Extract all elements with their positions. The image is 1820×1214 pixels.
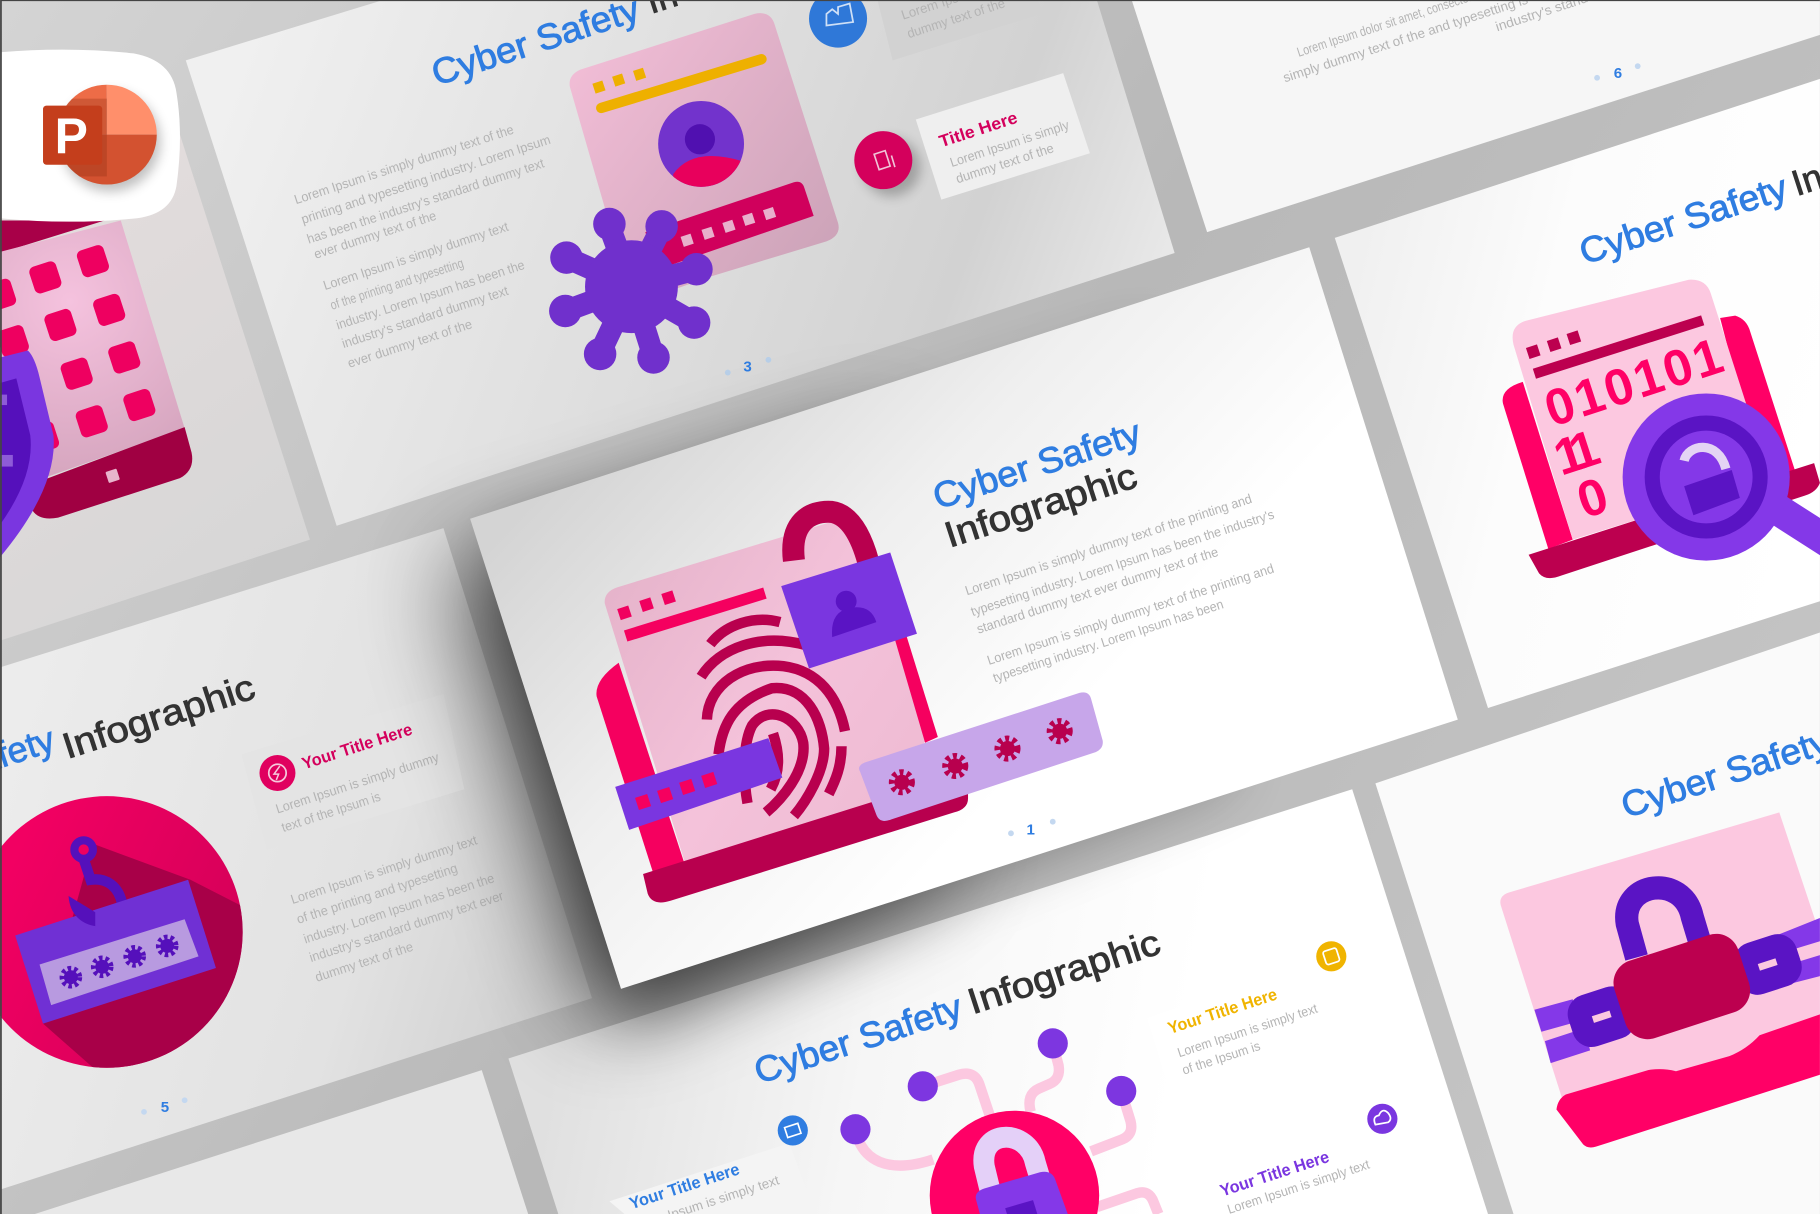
callout card: your title here: text of the Ipsum is [280, 789, 383, 835]
icon: password field [859, 692, 1103, 821]
title: network slide: Infographic [962, 921, 1165, 1022]
callout card: yellow title: Lorem Ipsum is simply text [1176, 1001, 1320, 1060]
pagination: page 1 [1008, 819, 1056, 838]
fingerprint [701, 620, 845, 816]
pagination: page 3: 3 [743, 358, 752, 375]
pagination: page 6: 6 [1614, 65, 1622, 82]
icon: blue building badge [809, 0, 867, 48]
text block: phishing slide body: industry's standard dummy text ever [307, 888, 506, 965]
panel: top-right slide [1132, 0, 1820, 232]
callout card: yellow title: Your Title Here [1165, 985, 1279, 1038]
binary digits: 010101 [1538, 327, 1730, 438]
title: center slide: Infographic [939, 455, 1142, 555]
icon: PowerPoint [43, 85, 160, 192]
text block: virus slide paragraph two: Lorem Ipsum is simply dummy text [321, 219, 511, 293]
text block: phishing slide body: Lorem Ipsum is simply dummy text [289, 832, 479, 907]
icon: PowerPoint: P [55, 108, 88, 164]
text block: center slide paragraph one: typesetting industry. Lorem Ipsum has been the industry's [969, 507, 1276, 619]
text block: center slide paragraph one: standard dummy text ever dummy text of the [975, 544, 1220, 637]
text block: center slide paragraph two: typesetting industry. Lorem Ipsum has been [991, 596, 1225, 685]
text block: phishing slide body: of the printing and typesetting [295, 860, 459, 927]
text block: virus slide paragraph two: ever dummy text of the [346, 316, 474, 371]
icon: network lock [930, 1111, 1099, 1214]
callout card: title here: dummy text of the [954, 140, 1056, 186]
center slide broad shadow [499, 337, 1230, 1027]
text block: virus slide paragraph two [321, 219, 526, 371]
panel: bottom-right lock slide [1375, 633, 1820, 1214]
text block: phishing slide body: industry. Lorem Ipsum has been the [302, 870, 496, 946]
panel: bottom-left partial slide [35, 1070, 528, 1214]
pagination: page 5 [141, 1097, 188, 1116]
text block: phishing slide body: dummy text of the [313, 939, 415, 985]
text block: center slide paragraph two: Lorem Ipsum is simply dummy text of the printing and [985, 561, 1276, 668]
panel: top-left tablet slide [0, 70, 310, 641]
text block: virus slide paragraph one [292, 122, 552, 262]
callout card: your title here [241, 694, 464, 850]
text block: virus slide paragraph two: industry. Lorem Ipsum has been the [334, 257, 526, 332]
title: center slide [928, 411, 1146, 555]
title: phishing slide: Infographic [57, 666, 260, 767]
icon: purple input bar [615, 738, 782, 830]
icon: virus [549, 208, 713, 374]
icon: shield [0, 351, 54, 557]
center slide near shadow [447, 435, 940, 1021]
icon: magnifier with open lock [1623, 393, 1820, 561]
title: network slide [749, 921, 1165, 1092]
callout card: top partial [878, 0, 1045, 60]
callout card: title here [916, 73, 1090, 200]
callout card: purple title [1196, 1104, 1407, 1214]
callout card: purple title: Your Title Here [1218, 1147, 1332, 1200]
callout card: blue title [609, 1115, 815, 1214]
title: network slide: Cyber Safety [749, 986, 967, 1092]
text block: virus slide paragraph two: industry's standard dummy text [340, 283, 510, 351]
pagination: page 6 [1594, 63, 1641, 82]
callout card: yellow title: of the Ipsum is [1180, 1038, 1262, 1078]
pagination: page 3 [725, 357, 771, 375]
icon: red building badge [854, 131, 920, 196]
binary digits: 0 [1570, 466, 1615, 529]
panel: center fingerprint slide [470, 247, 1458, 989]
callout card: title here: Title Here [937, 108, 1020, 151]
panel: right binary slide [1335, 79, 1820, 708]
icon: login window [570, 13, 839, 304]
text block: virus slide paragraph one: ever dummy text of the [312, 208, 438, 262]
title: center slide: Cyber Safety [928, 411, 1146, 517]
icon: padlock with user [781, 512, 917, 669]
callout card: your title here: Lorem Ipsum is simply dummy [274, 749, 441, 816]
binary digits: 11 [1547, 418, 1606, 486]
text block: virus slide paragraph one: Lorem Ipsum is simply dummy text of the [292, 122, 516, 207]
panel: phishing slide (page 5) [0, 528, 592, 1190]
icon: password phishing hook [0, 796, 243, 1068]
panel: network lock slide [508, 789, 1488, 1214]
icon: tablet [0, 221, 192, 519]
icon: laptop with fingerprint [596, 514, 968, 902]
callout card: yellow title [1147, 941, 1356, 1091]
pagination: page 5: 5 [161, 1099, 169, 1116]
text block: virus slide paragraph one: printing and typesetting industry. Lorem Ipsum [299, 132, 552, 227]
binary digits [1538, 327, 1730, 529]
callout card: title here: Lorem Ipsum is simply [948, 117, 1071, 170]
pagination: page 1: 1 [1027, 821, 1035, 838]
icon: chained lock on laptop [1500, 812, 1820, 1147]
text block: center slide paragraph one: Lorem Ipsum is simply dummy text of the printing and [963, 491, 1254, 598]
text block: virus slide paragraph one: has been the industry's standard dummy text [305, 155, 546, 247]
text block: virus slide paragraph two: of the printing and typesetting [328, 255, 465, 313]
badge: PowerPoint logo [0, 50, 180, 222]
icon: network nodes [840, 1028, 1136, 1144]
text block: phishing slide body [289, 832, 506, 985]
title: right slide: Cyber Safety [1574, 167, 1792, 272]
panel: virus slide (page 3) [186, 0, 1175, 526]
icon: network connection lines [855, 1043, 1158, 1214]
callout card: your title here: Your Title Here [300, 720, 415, 773]
title: phishing slide [0, 666, 260, 822]
icon: laptop with binary code [1503, 280, 1820, 578]
callout card: blue title: Your Title Here [627, 1160, 742, 1213]
